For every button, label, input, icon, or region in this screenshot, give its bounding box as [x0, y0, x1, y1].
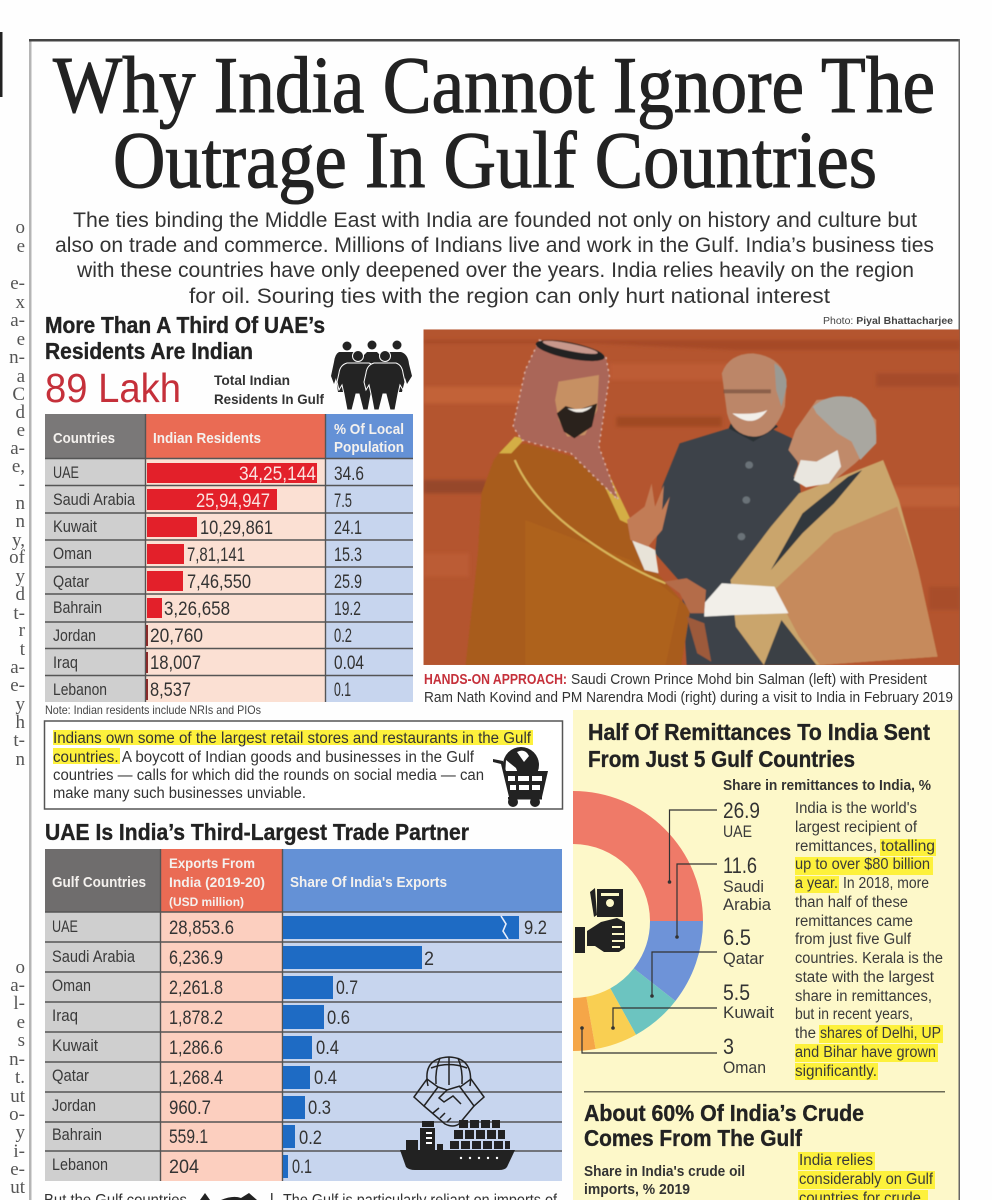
- neighbouring newspaper column: a-: [10, 975, 25, 996]
- leader lines: [580, 810, 717, 1053]
- values: share: 9.2: [524, 918, 547, 939]
- neighbouring newspaper column: y,: [12, 530, 25, 551]
- neighbouring newspaper column: t.: [15, 1067, 25, 1088]
- text block: crude: considerably on Gulf: [799, 1171, 934, 1188]
- callout text: make many such businesses unviable.: [53, 785, 306, 802]
- values: percent of local population: 0.2: [334, 626, 352, 647]
- neighbouring newspaper column: r: [19, 620, 26, 641]
- segment: UAE: [573, 791, 703, 921]
- chart labels: 26.9: [723, 798, 760, 823]
- values: share: 2: [424, 949, 434, 970]
- intro text block: with these countries have only deepened over the years. India relies heavily on the region: [76, 259, 914, 282]
- values: percent of local population: [334, 464, 364, 701]
- panel: crude oil: [584, 1091, 945, 1200]
- chart labels: 11.6: [723, 853, 757, 878]
- values: percent of local population: 25.9: [334, 572, 362, 593]
- values: percent of local population: 19.2: [334, 599, 361, 620]
- callout: retail boycott: [44, 721, 562, 809]
- row labels: countries: UAE: [52, 918, 78, 936]
- chart labels: [723, 798, 774, 1077]
- callout text: [53, 730, 532, 802]
- photo caption: Ram Nath Kovind and PM Narendra Modi (right) during a visit to India in February 2019: [424, 690, 953, 706]
- row labels: countries: Iraq: [52, 1007, 78, 1025]
- neighbouring newspaper column: s: [18, 1030, 25, 1051]
- neighbouring newspaper column: o-: [9, 1104, 25, 1125]
- neighbouring newspaper column: t-: [13, 603, 25, 624]
- values: percent of local population: 24.1: [334, 518, 362, 539]
- values: Indian residents: 8,537: [150, 680, 191, 701]
- neighbouring newspaper column: C: [12, 384, 25, 405]
- neighbouring newspaper column: n-: [9, 347, 25, 368]
- text block: remittances: India is the world's: [795, 800, 917, 817]
- table header: [45, 414, 413, 459]
- table header: Share Of India's Exports: [290, 874, 447, 891]
- neighbouring newspaper column: y: [16, 566, 26, 587]
- values: share: 0.4: [316, 1038, 339, 1059]
- text block: remittances: a year.: [795, 875, 838, 892]
- callout text: Indians own some of the largest retail stores and restaurants in the Gulf: [53, 730, 532, 747]
- text block: remittances: but in recent years,: [795, 1006, 913, 1023]
- neighbouring newspaper column: -: [19, 474, 25, 495]
- donut chart: [573, 791, 703, 1051]
- neighbouring newspaper column: e,: [12, 456, 25, 477]
- neighbouring newspaper column: l-: [13, 993, 25, 1014]
- text block: remittances: shares of Delhi, UP: [820, 1025, 941, 1042]
- intro text block: [55, 209, 934, 308]
- values: exports: 960.7: [169, 1098, 211, 1119]
- values: exports: [169, 918, 234, 1178]
- table header: % Of Local: [334, 421, 404, 438]
- values: Indian residents: 34,25,144: [239, 464, 316, 485]
- title: Outrage In Gulf Countries: [113, 117, 877, 205]
- neighbouring newspaper column: e: [17, 420, 25, 441]
- values: percent of local population: 34.6: [334, 464, 364, 485]
- icon: globe and handshake: [414, 1057, 484, 1126]
- text block: remittances: and Bihar have grown: [795, 1044, 936, 1061]
- panel: Indian residents in Gulf: [45, 312, 413, 717]
- table header: [45, 849, 562, 912]
- text block: remittances: state with the largest: [795, 969, 935, 986]
- segment: Qatar: [610, 968, 675, 1035]
- photo caption: Saudi Crown Prince Mohd bin Salman (left) with President: [571, 672, 927, 688]
- row labels: countries: Jordan: [53, 627, 96, 645]
- icon: shopping cart with globe: [493, 747, 548, 807]
- heading: trade: UAE Is India’s Third-Largest Trade Partner: [45, 819, 469, 845]
- segment: Saudi Arabia: [634, 921, 703, 1001]
- chart labels: Qatar: [723, 949, 764, 968]
- row labels: countries: Bahrain: [52, 1126, 102, 1144]
- table: Indian residents by country: [45, 414, 413, 702]
- neighbouring newspaper column: e: [17, 329, 25, 350]
- neighbouring newspaper column: i-: [13, 1141, 25, 1162]
- text block: remittances: share in remittances,: [795, 988, 932, 1005]
- neighbouring newspaper column: t: [20, 639, 26, 660]
- values: Indian residents: [150, 464, 316, 701]
- heading: remittances: From Just 5 Gulf Countries: [588, 746, 855, 772]
- values: exports: 204: [169, 1157, 199, 1178]
- values: percent of local population: 0.04: [334, 653, 364, 674]
- chart labels: 5.5: [723, 980, 750, 1005]
- table header: (USD million): [169, 895, 244, 909]
- values: exports: 2,261.8: [169, 978, 223, 999]
- neighbouring newspaper column: e: [17, 236, 25, 257]
- row labels: countries: Kuwait: [52, 1037, 98, 1055]
- values: share: 0.2: [299, 1128, 322, 1149]
- chart labels: Kuwait: [723, 1003, 774, 1022]
- row labels: countries: Saudi Arabia: [53, 491, 136, 509]
- values: Indian residents: 10,29,861: [200, 518, 273, 539]
- values: exports: 559.1: [169, 1127, 208, 1148]
- row labels: countries: Jordan: [52, 1097, 96, 1115]
- label: total Indian residents: [214, 372, 324, 407]
- neighbouring newspaper column: a-: [10, 438, 25, 459]
- table body background: [45, 849, 562, 1181]
- chart labels: 6.5: [723, 925, 751, 950]
- neighbouring newspaper column: ut: [10, 1177, 26, 1198]
- values: Indian residents: 7,46,550: [187, 572, 251, 593]
- chart subtitle: crude imports: [584, 1164, 745, 1198]
- chart labels: UAE: [723, 822, 752, 841]
- heading: crude: [584, 1100, 864, 1151]
- panel: UAE trade: [45, 819, 562, 1181]
- neighbouring newspaper column: e-: [10, 675, 25, 696]
- values: share: 0.1: [292, 1157, 312, 1178]
- clipped bottom divider: [271, 1193, 272, 1200]
- Crown Prince robe: [466, 443, 690, 665]
- text block: remittances: from just five Gulf: [795, 931, 912, 948]
- highlight marks: [53, 730, 533, 764]
- neighbouring newspaper column: [0, 32, 26, 1198]
- text block: remittances: remittances came: [795, 913, 913, 930]
- table header: Population: [334, 439, 404, 456]
- panel: yellow sidebar background: [573, 710, 959, 1200]
- values: share: 0.4: [314, 1068, 337, 1089]
- icon: container ship: [400, 1120, 515, 1170]
- photo: leaders shaking hands: [424, 329, 960, 665]
- intro text block: The ties binding the Middle East with India are founded not only on history and culture but: [73, 209, 917, 232]
- values: exports: 1,878.2: [169, 1008, 223, 1029]
- values: exports: 1,268.4: [169, 1068, 223, 1089]
- heading: crude: About 60% Of India’s Crude: [584, 1100, 864, 1126]
- values: share: [292, 918, 547, 1178]
- values: exports: 1,286.6: [169, 1038, 223, 1059]
- text block: remittances: the: [795, 1025, 816, 1042]
- values: exports: 6,236.9: [169, 948, 223, 969]
- chart subtitle: crude imports: imports, % 2019: [584, 1182, 690, 1198]
- heading: residents: More Than A Third Of UAE’s: [45, 312, 325, 338]
- values: share: 0.7: [336, 978, 358, 999]
- row labels: countries: [53, 464, 136, 699]
- chart labels: Arabia: [723, 895, 772, 914]
- icon: group of people: [331, 340, 412, 410]
- photo caption: HANDS-ON APPROACH:: [424, 672, 567, 688]
- chart labels: Saudi: [723, 877, 764, 896]
- values: Indian residents: 3,26,658: [164, 599, 230, 620]
- photo credit: Photo: Piyal Bhattacharjee: [823, 315, 953, 327]
- photo caption: [424, 672, 953, 706]
- raised hand: [627, 483, 670, 547]
- values: share: 0.6: [327, 1008, 350, 1029]
- table: exports to Gulf countries: [45, 849, 562, 1181]
- text block: remittances: [795, 800, 943, 1080]
- values: share: 0.3: [308, 1098, 331, 1119]
- table header: Gulf Countries: [52, 874, 146, 891]
- Kovind: [655, 428, 801, 665]
- text block: remittances: totalling: [881, 838, 935, 855]
- heading: residents: Residents Are Indian: [45, 338, 253, 364]
- row labels: countries: Qatar: [53, 573, 89, 591]
- values: percent of local population: 7.5: [334, 491, 352, 512]
- heading: residents: [45, 312, 325, 364]
- panel: remittances: [573, 719, 943, 1080]
- bars: residents: [146, 463, 317, 700]
- table header: Countries: [53, 430, 115, 447]
- chart subtitle: Share in remittances to India, %: [723, 778, 931, 794]
- neighbouring newspaper column: a-: [10, 310, 25, 331]
- neighbouring newspaper column: a-: [10, 657, 25, 678]
- neighbouring newspaper column: x: [16, 292, 26, 313]
- chart labels: Oman: [723, 1058, 766, 1077]
- row labels: countries: Oman: [53, 545, 92, 563]
- row labels: countries: Lebanon: [52, 1156, 108, 1174]
- intro text block: also on trade and commerce. Millions of Indians live and work in the Gulf. India’s business ties: [55, 234, 934, 257]
- neighbouring newspaper column: y: [16, 1122, 26, 1143]
- title: Why India Cannot Ignore The: [53, 42, 935, 130]
- segment: Kuwait: [586, 988, 636, 1049]
- heading: remittances: Half Of Remittances To India Sent: [588, 719, 930, 745]
- neighbouring newspaper column: o: [16, 217, 25, 238]
- neighbouring newspaper column: n-: [9, 1049, 25, 1070]
- text block: remittances: largest recipient of: [795, 819, 918, 836]
- highlight marks: [795, 839, 943, 1080]
- icon: hand holding money: [575, 888, 625, 953]
- heading: crude: Comes From The Gulf: [584, 1125, 802, 1151]
- big number: 89 Lakh: 89 Lakh: [45, 365, 181, 411]
- values: percent of local population: 15.3: [334, 545, 362, 566]
- text block: remittances: than half of these: [795, 894, 908, 911]
- text block: remittances: significantly.: [795, 1063, 877, 1080]
- chart labels: 3: [723, 1034, 734, 1059]
- neighbouring newspaper column: e-: [10, 1159, 25, 1180]
- text block: crude: India relies: [799, 1152, 873, 1169]
- table body background: [45, 414, 413, 702]
- row labels: countries: Oman: [52, 977, 91, 995]
- bar break mark: [501, 916, 508, 939]
- callout text: countries — calls for which did the rounds on social media — can: [53, 767, 484, 784]
- highlight marks: [798, 1152, 935, 1200]
- label: total Indian residents: Residents In Gulf: [214, 391, 324, 407]
- row labels: countries: Kuwait: [53, 518, 97, 536]
- text block: crude: [799, 1152, 934, 1200]
- neighbouring newspaper column: of: [9, 547, 26, 568]
- values: exports: 28,853.6: [169, 918, 234, 939]
- text block: remittances: remittances,: [795, 838, 877, 855]
- heading: remittances: [588, 719, 930, 772]
- values: Indian residents: 20,760: [150, 626, 203, 647]
- Modi: [731, 460, 938, 665]
- neighbouring newspaper column: d: [16, 584, 26, 605]
- handshake: [664, 578, 706, 613]
- table note: Note: Indian residents include NRIs and PIOs: [45, 703, 261, 717]
- values: Indian residents: 25,94,947: [196, 491, 270, 512]
- title: [53, 42, 935, 205]
- table header: Exports From: [169, 856, 255, 871]
- row labels: countries: Bahrain: [53, 599, 102, 617]
- neighbouring newspaper column: n: [16, 749, 26, 770]
- neighbouring newspaper column: h: [16, 712, 26, 733]
- intro text block: for oil. Souring ties with the region can only hurt national interest: [189, 285, 830, 308]
- neighbouring newspaper column: a: [17, 366, 26, 387]
- neighbouring newspaper column: d: [16, 402, 26, 423]
- label: total Indian residents: Total Indian: [214, 372, 290, 388]
- table header: India (2019-20): [169, 875, 265, 890]
- neighbouring newspaper column: n: [16, 493, 26, 514]
- values: Indian residents: 7,81,141: [187, 545, 245, 566]
- row labels: countries: Qatar: [52, 1067, 89, 1085]
- segment: Oman: [573, 997, 596, 1051]
- neighbouring newspaper column: e-: [10, 273, 25, 294]
- neighbouring newspaper column: e: [17, 1012, 25, 1033]
- row labels: countries: [52, 918, 136, 1174]
- row labels: countries: UAE: [53, 464, 79, 482]
- neighbouring newspaper column: t-: [13, 730, 25, 751]
- neighbouring newspaper column: y: [16, 694, 26, 715]
- text block: remittances: In 2018, more: [843, 875, 929, 892]
- table header: Indian Residents: [153, 430, 261, 447]
- chart subtitle: crude imports: Share in India's crude oil: [584, 1164, 745, 1180]
- row labels: countries: Saudi Arabia: [52, 948, 136, 966]
- values: percent of local population: 0.1: [334, 680, 351, 701]
- text block: remittances: countries. Kerala is the: [795, 950, 943, 967]
- row labels: countries: Lebanon: [53, 681, 107, 699]
- neighbouring newspaper column: n: [16, 511, 26, 532]
- row labels: countries: Iraq: [53, 654, 78, 672]
- callout text: countries. A boycott of Indian goods and businesses in the Gulf: [53, 749, 475, 766]
- text block: remittances: up to over $80 billion: [795, 856, 930, 873]
- bars: share of exports: [283, 916, 519, 1178]
- clipped bottom icon: [200, 1193, 257, 1200]
- neighbouring newspaper column: ut: [10, 1086, 26, 1107]
- values: Indian residents: 18,007: [150, 653, 201, 674]
- neighbouring newspaper column: o: [16, 957, 25, 978]
